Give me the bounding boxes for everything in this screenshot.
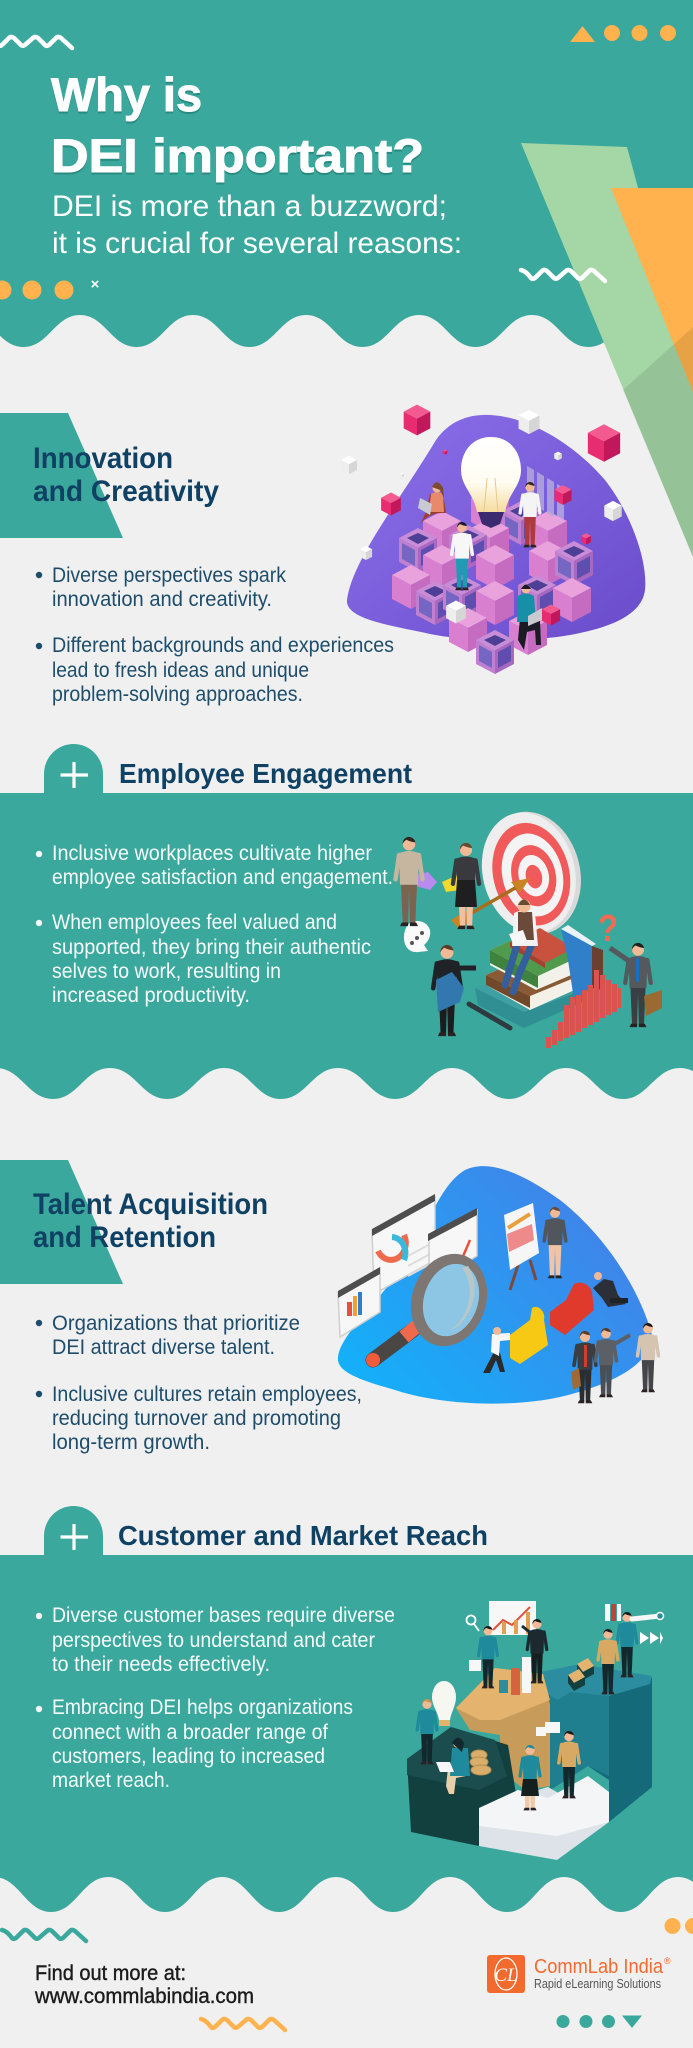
illustration: lightbulb on cubes — [341, 405, 645, 674]
figure: man pushing puzzle — [483, 1327, 510, 1373]
lightbulb — [461, 437, 521, 528]
chart board — [489, 1601, 536, 1635]
title — [51, 68, 424, 182]
heading: customer and market reach: Customer and Market Reach — [118, 1520, 488, 1551]
tab: employee engagement plus icon — [44, 744, 103, 800]
briefcase icon — [469, 1660, 481, 1671]
figure: man in suit with briefcase — [610, 943, 662, 1027]
text block: talent bullets: reducing turnover and promoting — [52, 1406, 341, 1430]
floating cubes — [341, 405, 622, 626]
text block: customer bullets: perspectives to understand and cater — [52, 1628, 375, 1652]
text block: talent bullets — [36, 1311, 362, 1454]
figure: seated man on books — [505, 900, 538, 992]
subtitle: DEI is more than a buzzword; — [52, 190, 447, 223]
yellow puzzle piece — [510, 1307, 548, 1364]
dark puzzle piece — [407, 1727, 517, 1846]
text block: employee engagement bullets: Inclusive workplaces cultivate higher — [52, 841, 372, 865]
target — [469, 801, 594, 945]
figure: man holding bulb — [417, 1699, 437, 1764]
arrow — [451, 878, 530, 928]
bars icon — [605, 1604, 621, 1621]
blue blob — [338, 1166, 652, 1404]
squiggle: footer left — [2, 1930, 86, 1941]
text block: innovation bullets: Different backgrounds and experiences — [52, 633, 394, 657]
text block: innovation bullets: problem-solving approaches. — [52, 682, 303, 706]
heading: innovation and creativity: and Creativity — [33, 475, 220, 508]
panel: innovation heading tag — [0, 413, 123, 538]
footer call to action — [34, 1961, 254, 2008]
figure: seated woman with laptop — [436, 1738, 470, 1794]
figure: man with telescope — [617, 1612, 664, 1677]
stacked boxes — [568, 1658, 594, 1691]
panel: customer wave band — [0, 1555, 693, 1912]
logo: CommLab India — [487, 1955, 671, 1993]
text block: talent bullets: Inclusive cultures retain employees, — [52, 1382, 362, 1406]
figure: man with backpack — [433, 945, 476, 1036]
text block: innovation bullets: Diverse perspectives spark — [52, 563, 286, 587]
header wave panel — [0, 0, 693, 347]
footer call to action: Find out more at: — [35, 1961, 186, 1985]
text block: customer bullets: Embracing DEI helps organizations — [52, 1695, 353, 1719]
text block: employee engagement bullets: employee satisfaction and engagement. — [52, 865, 393, 889]
figure: seated woman with laptop — [418, 482, 446, 525]
text block: employee engagement bullets: selves to work, resulting in — [52, 959, 281, 983]
figure: man in teal trousers — [452, 522, 472, 590]
icon: footer dots and triangle — [556, 2015, 642, 2028]
purple blob — [347, 415, 645, 640]
text block: innovation bullets: innovation and creativity. — [52, 587, 272, 611]
heading: innovation and creativity: Innovation — [33, 442, 173, 475]
figure: businessman pointing — [596, 1328, 630, 1397]
presentation board — [504, 1203, 539, 1290]
icon: footer top right dots — [664, 1918, 693, 1934]
figure: standing man at panel — [520, 482, 540, 547]
logo: CommLab India: ® — [664, 1956, 671, 1966]
figure: woman with tablet — [520, 1745, 540, 1810]
figure: woman in dark dress — [453, 843, 479, 929]
teal puzzle piece — [541, 1666, 652, 1822]
arrow icons — [640, 1632, 663, 1644]
chart windows — [338, 1194, 477, 1337]
bar chart — [546, 970, 621, 1048]
logo: CommLab India: CommLab India — [534, 1956, 664, 1978]
heading: talent acquisition and retention: and Retention — [33, 1221, 216, 1254]
icon: top right triangle and dots — [570, 25, 676, 42]
figure: man dark suit at board — [522, 1619, 547, 1683]
figure: man lying on puzzle — [593, 1272, 628, 1307]
squiggle: top left — [0, 37, 72, 48]
text block: innovation bullets — [36, 563, 394, 706]
tab: customer market plus icon — [44, 1506, 103, 1562]
bars on puzzle — [499, 1657, 531, 1695]
speech bubbles — [536, 1722, 560, 1736]
heading: talent acquisition and retention — [33, 1188, 268, 1254]
text block: customer bullets: connect with a broader range of — [52, 1720, 328, 1744]
figure: man in vest with papers — [638, 1323, 658, 1392]
puzzle pieces — [412, 872, 470, 892]
logo: CommLab India: Rapid eLearning Solutions — [534, 1976, 661, 1991]
white puzzle piece — [479, 1787, 609, 1860]
squiggle: footer orange — [201, 2019, 285, 2030]
text block: employee engagement bullets: When employees feel valued and — [52, 910, 337, 934]
subtitle — [52, 190, 462, 260]
figure: seated man with laptop — [517, 584, 542, 650]
panel: talent heading tag — [0, 1160, 123, 1284]
figure: man with vest — [396, 837, 422, 926]
book stack — [475, 925, 603, 1028]
text block: employee engagement bullets: increased productivity. — [52, 983, 250, 1007]
magnifying glass — [366, 1244, 499, 1367]
tan puzzle piece — [456, 1668, 550, 1790]
text block: employee engagement bullets — [36, 841, 393, 1007]
speech bubble — [404, 921, 430, 952]
panel: employee engagement wave band — [0, 793, 693, 1099]
text block: customer bullets — [36, 1603, 395, 1792]
data panel — [527, 466, 564, 520]
logo: CommLab India: CL — [494, 1965, 518, 1986]
title: Why is — [51, 68, 202, 121]
squiggle: header right — [521, 270, 605, 281]
footer call to action: www.commlabindia.com — [34, 1984, 254, 2008]
figure: man reading — [559, 1731, 579, 1798]
text block: customer bullets: customers, leading to increased — [52, 1744, 325, 1768]
heading: innovation and creativity — [33, 442, 220, 508]
illustration: business puzzle — [407, 1601, 664, 1860]
coins — [470, 1750, 491, 1775]
figure: businessman with red tie — [571, 1331, 596, 1403]
red puzzle piece — [550, 1283, 594, 1335]
heading: employee engagement: Employee Engagement — [119, 758, 412, 789]
text block: customer bullets: market reach. — [52, 1768, 170, 1792]
illustration: magnifier and puzzle — [338, 1166, 658, 1404]
subtitle: it is crucial for several reasons: — [52, 227, 462, 260]
heading: talent acquisition and retention: Talent Acquisition — [33, 1188, 268, 1221]
text block: talent bullets: long-term growth. — [52, 1430, 210, 1454]
icon: left dots and cross: × — [91, 276, 100, 293]
text block: customer bullets: Diverse customer bases require diverse — [52, 1603, 395, 1627]
decorative green and orange shards — [521, 143, 693, 557]
isometric cube stack — [392, 488, 593, 674]
text block: innovation bullets: lead to fresh ideas and unique — [52, 658, 309, 682]
title: DEI important? — [51, 129, 424, 182]
figure: man tan shirt — [598, 1629, 618, 1694]
text block: customer bullets: to their needs effectively. — [52, 1652, 270, 1676]
figure: woman presenting — [544, 1207, 566, 1278]
icon: left dots and cross — [0, 276, 100, 300]
magnifier icon — [466, 1616, 479, 1631]
figure: man teal shirt at board — [479, 1626, 497, 1688]
pen — [469, 1004, 510, 1028]
text block: talent bullets: DEI attract diverse talent. — [52, 1335, 275, 1359]
illustration: target and books — [396, 801, 662, 1048]
lightbulb — [432, 1681, 456, 1726]
text block: employee engagement bullets: supported, they bring their authentic — [52, 935, 371, 959]
question mark: ? — [598, 908, 618, 950]
text block: talent bullets: Organizations that prioritize — [52, 1311, 300, 1335]
